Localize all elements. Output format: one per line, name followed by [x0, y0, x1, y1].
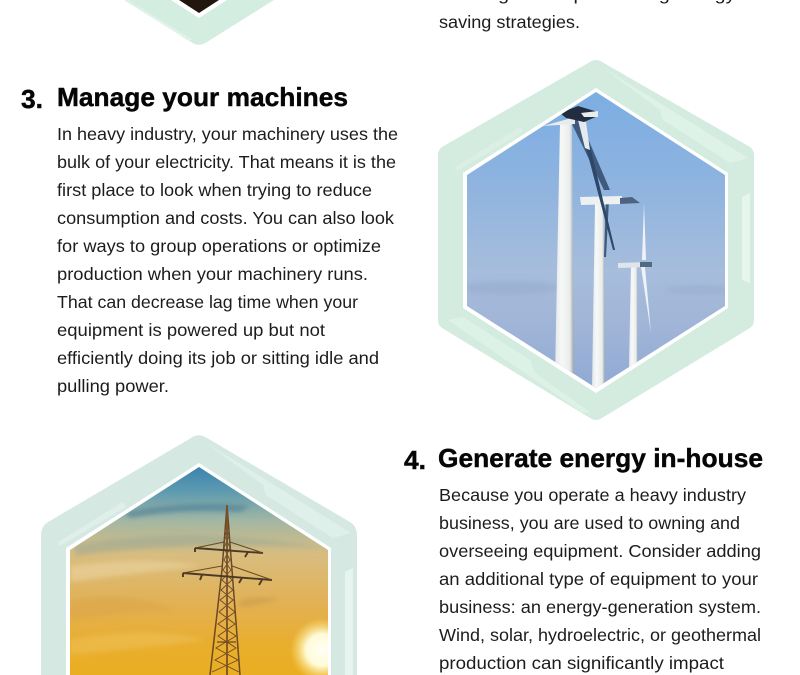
section 3 body text: bulk of your electricity. That means it is the [57, 152, 396, 172]
right text tail of section 2: saving strategies. [439, 12, 580, 32]
section 3 number: 3. [21, 84, 43, 114]
section 3 body text: for ways to group operations or optimize [57, 236, 381, 256]
section 3 body text: That can decrease lag time when your [57, 292, 358, 312]
far turbine [629, 263, 638, 367]
section 3 body text: efficiently doing its job or sitting idle and [57, 348, 379, 368]
right text tail of section 2 [439, 0, 742, 32]
section 3 body text [57, 124, 398, 396]
section 3 body text: equipment is powered up but not [57, 320, 325, 340]
section 4 body text: Because you operate a heavy industry [439, 485, 746, 505]
hexagon image: power pylon at sunset [41, 435, 357, 675]
section 3 body text: production when your machinery runs. [57, 264, 368, 284]
section 4 body text: business, you are used to owning and [439, 513, 740, 533]
pylon [183, 505, 272, 675]
section 4 body text: Wind, solar, hydroelectric, or geothermal [439, 625, 761, 645]
section 4 body text [439, 485, 761, 673]
section 4 number: 4. [404, 445, 426, 475]
section 3 body text: consumption and costs. You can also look [57, 208, 394, 228]
section 4 body text: production can significantly impact [439, 653, 724, 673]
section 4 body text: overseeing equipment. Consider adding [439, 541, 761, 561]
section 3 body text: In heavy industry, your machinery uses the [57, 124, 398, 144]
hexagon image: wind turbines [448, 67, 750, 413]
section 4 body text: an additional type of equipment to your [439, 569, 758, 589]
section 4 heading: Generate energy in-house [438, 443, 763, 473]
section 4 body text: business: an energy-generation system. [439, 597, 761, 617]
section 3 heading: Manage your machines [57, 82, 348, 112]
hexagon image: top cropped photo [124, 0, 274, 45]
section 3 body text: first place to look when trying to reduce [57, 180, 372, 200]
near turbine [555, 123, 574, 376]
middle turbine [592, 203, 605, 390]
section 3 body text: pulling power. [57, 376, 169, 396]
